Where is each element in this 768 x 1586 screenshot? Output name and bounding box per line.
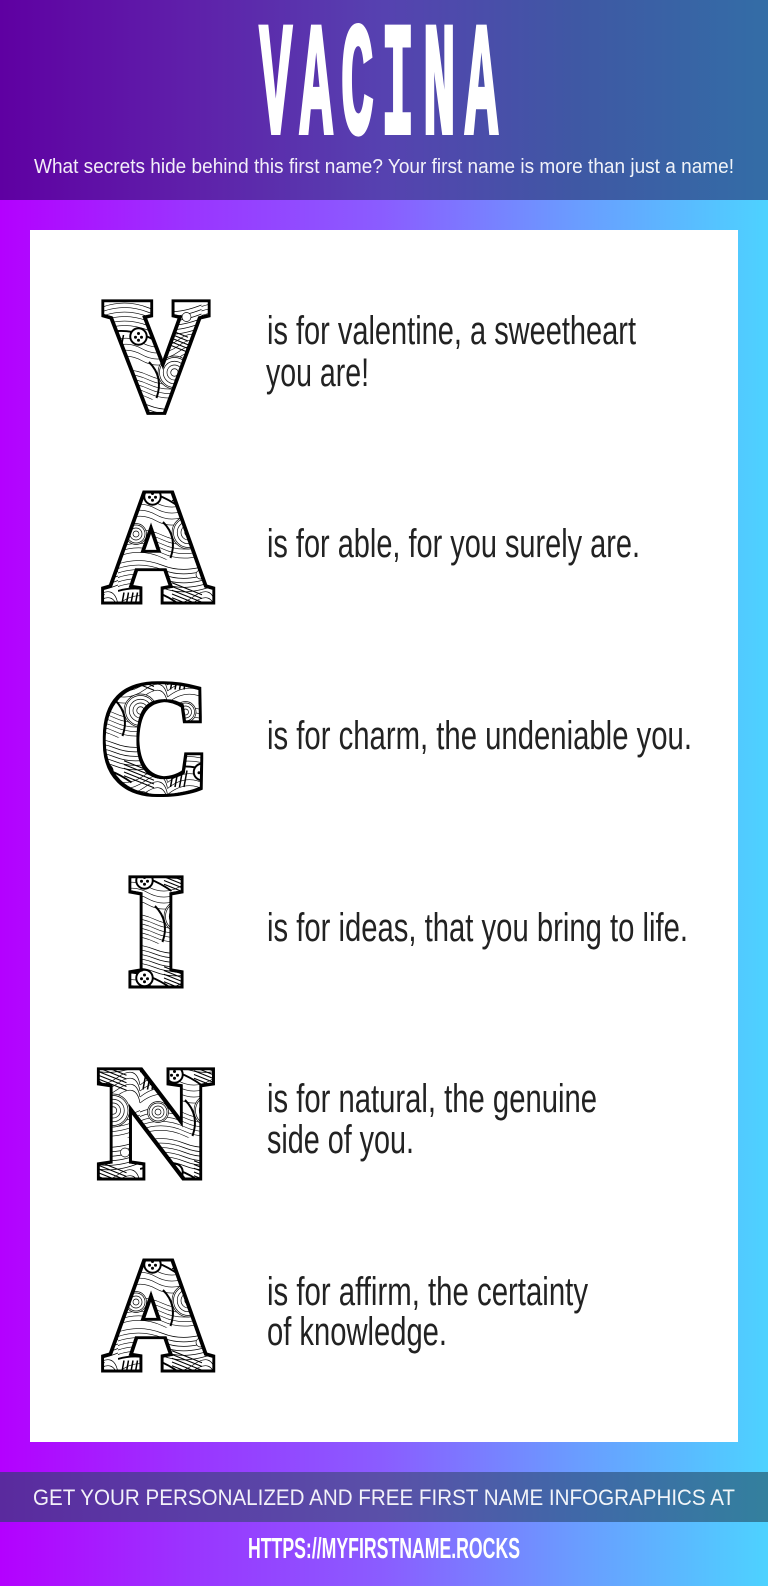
row: N <box>100 1039 597 1208</box>
panel: white content card <box>30 230 738 1442</box>
icon: patterned letter N: N <box>100 1039 210 1208</box>
header band <box>0 0 768 200</box>
footer URL: HTTPS://MYFIRSTNAME.ROCKS <box>248 1533 520 1565</box>
text: A meaning: is for able, for you surely are. <box>267 522 640 566</box>
row: A second <box>106 1231 588 1400</box>
text: second A meaning: is for affirm, the certainty <box>267 1270 588 1314</box>
footer call to action: GET YOUR PERSONALIZED AND FREE FIRST NAME INFOGRAPHICS AT <box>33 1485 735 1510</box>
text: N meaning: is for natural, the genuine <box>267 1077 597 1121</box>
text: V meaning <box>266 309 636 395</box>
text: N meaning: side of you. <box>267 1118 414 1162</box>
row: C <box>102 654 692 823</box>
footer band <box>0 1472 768 1522</box>
subtitle: What secrets hide behind this first name? Your first name is more than just a name! <box>34 155 734 178</box>
text: second A meaning <box>267 1270 588 1354</box>
row: I <box>130 847 688 1016</box>
text: N meaning <box>267 1077 597 1162</box>
icon: patterned letter V: V <box>106 271 206 440</box>
row: V <box>106 271 636 440</box>
icon: patterned letter I: I <box>130 847 182 1016</box>
row: A <box>106 463 640 632</box>
icon: patterned letter A: A <box>106 463 210 632</box>
icon: patterned letter A: A <box>106 1231 210 1400</box>
text: second A meaning: of knowledge. <box>267 1310 447 1354</box>
text: V meaning: is for valentine, a sweetheart <box>267 309 636 353</box>
title: VACINA <box>259 0 498 181</box>
icon: patterned letter C: C <box>102 654 208 823</box>
text: V meaning: you are! <box>266 351 369 395</box>
